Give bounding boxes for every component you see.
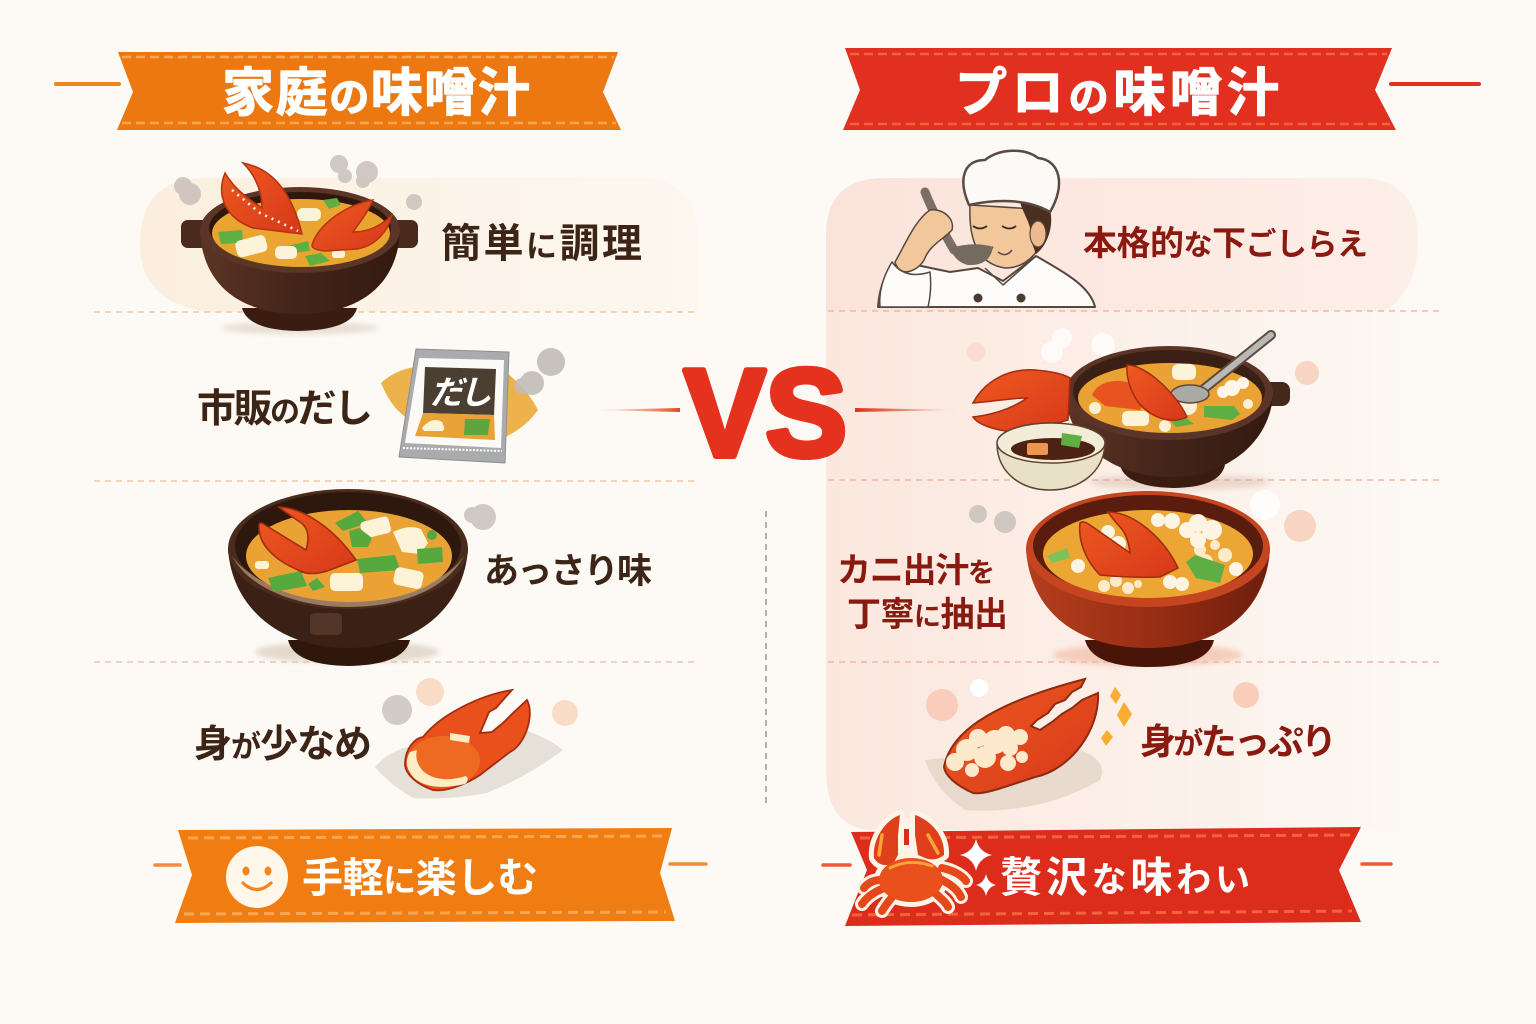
label: carefully extracted crab stock: カニ出汁を <box>837 552 995 590</box>
label: less meat: 身が少なめ <box>194 724 372 766</box>
label: authentic preparation: 本格的な下ごしらえ <box>1083 225 1368 263</box>
VS mark: VS <box>684 345 847 483</box>
icon: red lacquer bowl with claw and crab meat <box>969 490 1316 667</box>
icon: large crab claw full of meat <box>925 679 1259 811</box>
heading banner: home miso soup: 家庭の味噌汁 <box>222 65 530 123</box>
panel: professional row one highlight <box>826 178 1418 311</box>
icon: dashi packet: だし <box>430 374 492 411</box>
label: light flavour: あっさり味 <box>484 552 652 591</box>
icon: smiling face <box>226 846 288 908</box>
label: store-bought dashi: 市販のだし <box>197 388 373 431</box>
label: easy to cook: 簡単に調理 <box>441 222 642 266</box>
icon: ceramic bowl with claw <box>228 489 496 666</box>
footer banner: enjoy casually: 手軽に楽しむ <box>302 855 538 901</box>
icon: sparkles <box>960 839 996 896</box>
label: carefully extracted crab stock: 丁寧に抽出 <box>847 596 1008 634</box>
icon: crab sticker <box>862 815 966 911</box>
icon: small crab claw <box>375 678 578 798</box>
icon: chef tasting from ladle <box>878 151 1095 307</box>
row dividers <box>94 311 1440 805</box>
panel: home row one highlight <box>140 178 698 312</box>
icon: dashi packet <box>381 348 565 463</box>
footer banner: luxurious flavour: 贅沢な味わい <box>1000 854 1250 901</box>
connector: VS right line <box>855 408 957 412</box>
label: carefully extracted crab stock <box>837 552 1008 634</box>
icon: clay pot with crab claws <box>174 155 422 334</box>
connector: VS left line <box>589 408 680 412</box>
panel: professional column background <box>826 300 1440 830</box>
label: plenty of meat: 身がたっぷり <box>1140 721 1337 762</box>
heading banner: home miso soup <box>117 52 621 130</box>
footer banner: enjoy casually <box>175 828 675 923</box>
heading banner: professional miso soup: プロの味噌汁 <box>955 65 1279 123</box>
connector lines <box>56 84 1479 865</box>
icon: pot with claw, spoon and dipping sauce <box>967 328 1319 490</box>
heading banner: professional miso soup <box>843 48 1396 130</box>
footer banner: luxurious flavour <box>845 815 1361 926</box>
